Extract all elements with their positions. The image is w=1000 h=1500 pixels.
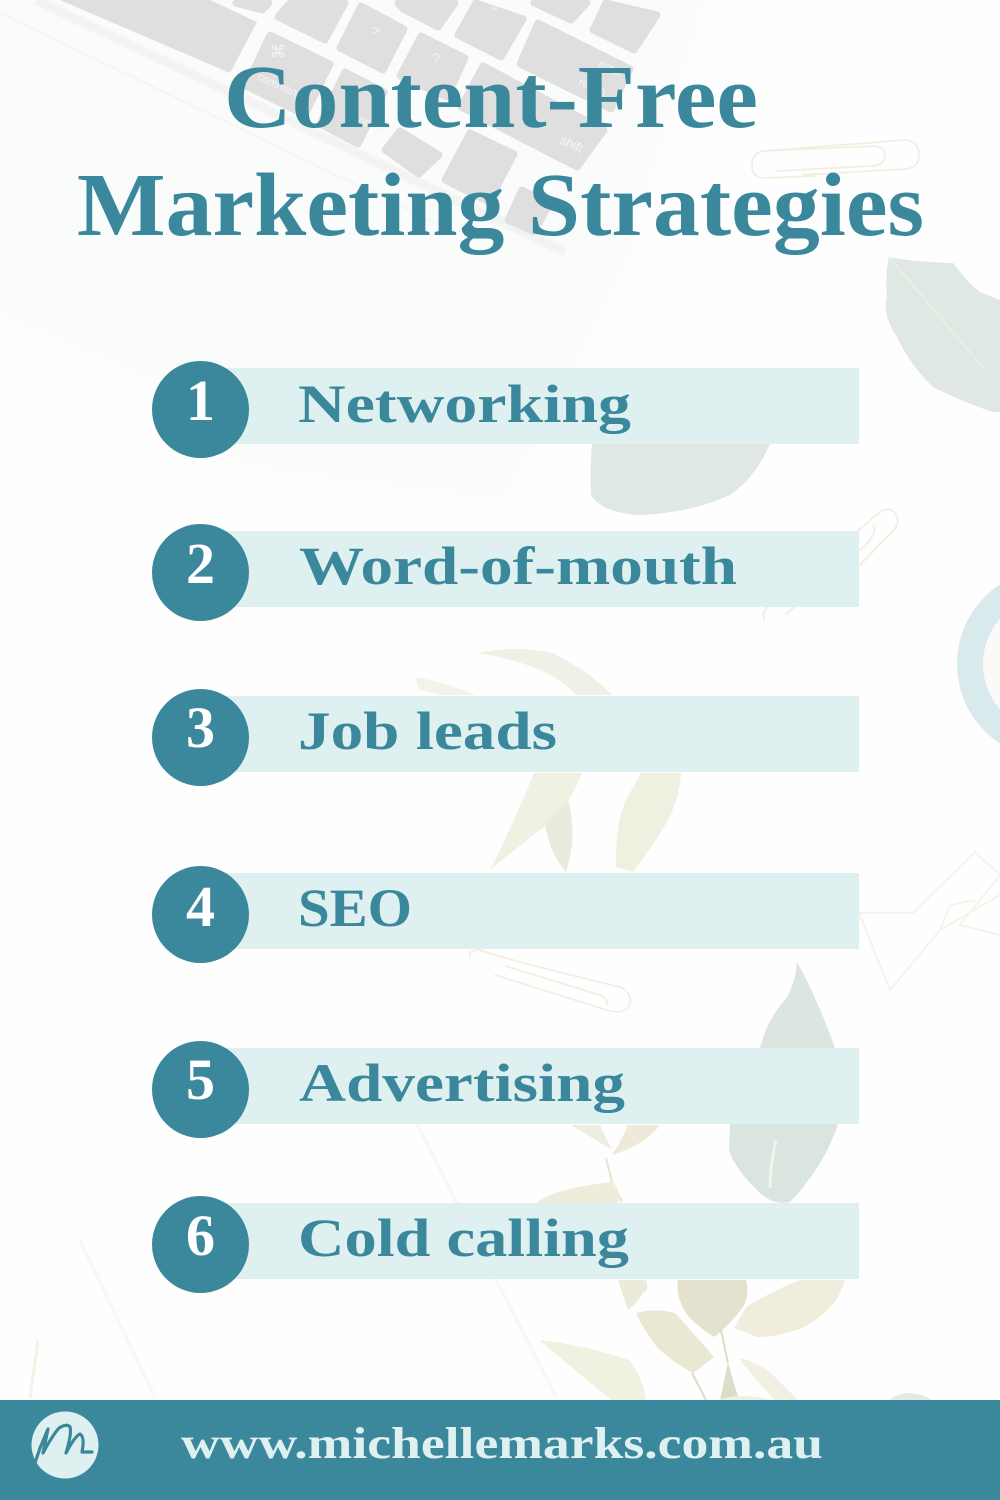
list item 3: Job leads: Job leads [298, 701, 557, 761]
list item 4: SEO: SEO [298, 878, 412, 938]
background photo: leaves [30, 225, 1000, 1400]
list item 2: Word-of-mouth: Word-of-mouth [299, 536, 737, 596]
website address: www.michellemarks.com.au [181, 1419, 823, 1468]
list item 5: Advertising [152, 1041, 859, 1138]
keyboard legends: return [577, 76, 608, 99]
list item 4: SEO [152, 866, 859, 963]
list item 1: Networking: Networking [298, 374, 631, 434]
list item 6: Cold calling [152, 1196, 859, 1293]
list item 5: Advertising: 5 [186, 1047, 215, 1112]
background photo: laptop [0, 0, 710, 500]
keyboard legends: shift [558, 132, 586, 156]
keyboard legends: enter [597, 58, 625, 79]
background photo: paperclips [469, 140, 1000, 1012]
background photo: mug [970, 582, 1000, 746]
keyboard legends: option [357, 114, 389, 137]
title [77, 48, 924, 255]
title: Content-Free [224, 48, 758, 147]
keyboard legends [256, 4, 625, 156]
list item 3: Job leads [152, 689, 859, 786]
icon: logo badge [32, 1412, 98, 1478]
list item 4: SEO: 4 [186, 874, 215, 939]
keyboard legends: ? [432, 50, 440, 66]
list item 6: Cold calling: 6 [186, 1203, 215, 1268]
list item 2: Word-of-mouth [152, 524, 859, 621]
keyboard legends: command [256, 71, 305, 102]
list item 5: Advertising: Advertising [299, 1053, 625, 1113]
title: Marketing Strategies [77, 156, 924, 255]
list item 1: Networking: 1 [186, 368, 215, 433]
list item 1: Networking [152, 361, 859, 458]
keyboard legends: " [492, 4, 497, 20]
footer band [0, 1400, 1000, 1500]
list item 6: Cold calling: Cold calling [298, 1208, 629, 1268]
keyboard legends: ⌘ [270, 44, 286, 61]
list item 2: Word-of-mouth: 2 [186, 531, 215, 596]
list item 3: Job leads: 3 [186, 695, 215, 760]
keyboard legends: > [372, 22, 380, 38]
